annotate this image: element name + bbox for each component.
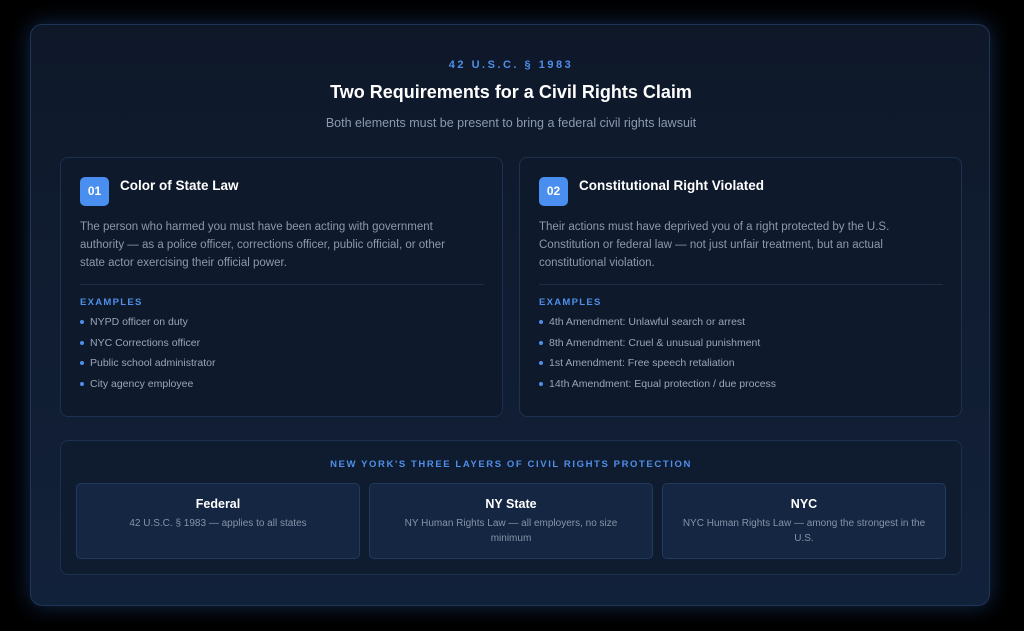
badge 01 — [80, 177, 109, 206]
examples list — [80, 316, 216, 390]
layer: NY state: NY State — [485, 497, 537, 511]
description: constitutional violation. — [539, 257, 655, 269]
subtitle: Both elements must be present to bring a federal civil rights lawsuit — [326, 116, 696, 130]
title: Two Requirements for a Civil Rights Claim — [330, 82, 692, 102]
panel: color of state law — [60, 157, 503, 417]
examples label: EXAMPLES — [80, 297, 143, 308]
layer: NY state: minimum — [491, 533, 531, 544]
layer: federal: 42 U.S.C. § 1983 — applies to all states — [129, 518, 307, 529]
description: The person who harmed you must have been acting with government — [80, 221, 433, 233]
examples label: EXAMPLES — [539, 297, 602, 308]
examples list: 14th Amendment: Equal protection / due process — [549, 378, 776, 390]
badge 01: 01 — [88, 184, 101, 198]
layer: NYC — [662, 483, 946, 559]
heading: Color of State Law — [120, 178, 239, 193]
layer: federal: Federal — [196, 497, 240, 511]
examples list: City agency employee — [90, 378, 193, 390]
description — [539, 221, 889, 269]
heading: Constitutional Right Violated — [579, 178, 764, 193]
description — [80, 221, 445, 269]
badge 02: 02 — [547, 184, 560, 198]
eyebrow: 42 U.S.C. § 1983 — [449, 59, 573, 71]
description: authority — as a police officer, corrections officer, public official, or other — [80, 239, 445, 251]
layers heading: NEW YORK'S THREE LAYERS OF CIVIL RIGHTS PROTECTION — [330, 459, 692, 470]
examples list: Public school administrator — [90, 357, 215, 369]
description: Constitution or federal law — not just unfair treatment, but an actual — [539, 239, 883, 251]
layer: federal — [76, 483, 360, 559]
description: state actor exercising their official power. — [80, 257, 287, 269]
layer: NY state — [369, 483, 653, 559]
layer: NYC: NYC — [791, 497, 817, 511]
layer: NYC: NYC Human Rights Law — among the strongest in the — [683, 518, 925, 529]
examples list — [539, 316, 776, 390]
examples list: 4th Amendment: Unlawful search or arrest — [549, 316, 745, 328]
examples list: NYPD officer on duty — [90, 316, 188, 328]
panel: three layers — [60, 440, 962, 575]
panel: constitutional right violated — [519, 157, 962, 417]
layer: NY state: NY Human Rights Law — all employers, no size — [405, 518, 617, 529]
description: Their actions must have deprived you of a right protected by the U.S. — [539, 221, 889, 233]
layer: NYC: U.S. — [794, 533, 814, 544]
examples list: 8th Amendment: Cruel & unusual punishment — [549, 336, 760, 348]
badge 02 — [539, 177, 568, 206]
examples list: NYC Corrections officer — [90, 336, 200, 348]
examples list: 1st Amendment: Free speech retaliation — [549, 357, 735, 369]
